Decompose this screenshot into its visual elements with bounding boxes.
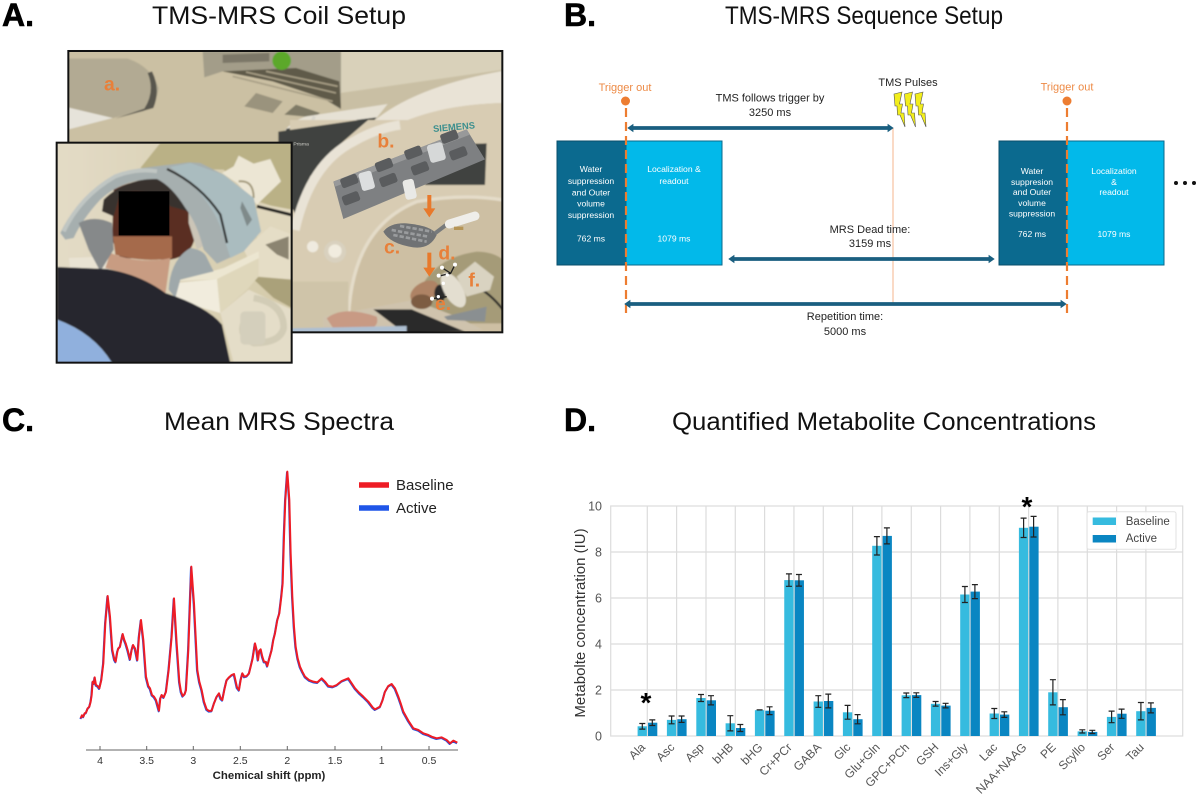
x axis category labels <box>626 740 1147 797</box>
x axis category labels: Scyllo <box>1056 740 1088 773</box>
orange labels a to f: f. <box>468 271 480 292</box>
x axis tick labels: 0.5 <box>422 755 436 767</box>
legend: Baseline <box>1126 516 1170 528</box>
timing block left: water suppression: 762 ms <box>577 234 605 244</box>
x axis category labels: Asp <box>682 740 707 765</box>
significance star: Ala: * <box>641 687 652 718</box>
text: TMS follows trigger by 3250 ms: TMS follows trigger by <box>716 92 825 104</box>
x axis tick labels <box>97 755 436 767</box>
text: MRS dead time 3159 ms <box>830 224 910 250</box>
label: TMS pulses: TMS Pulses <box>878 77 938 89</box>
title: Mean MRS Spectra: Mean MRS Spectra <box>164 408 394 436</box>
timing block right: water suppression: volume <box>1018 198 1046 208</box>
title: Quantified Metabolite Concentrations: Quantified Metabolite Concentrations <box>672 408 1096 436</box>
timing block right: localization and readout: & <box>1111 177 1117 187</box>
trigger out left: label, dot, dashed line: Trigger out <box>599 82 651 94</box>
text: repetition time 5000 ms <box>807 311 883 338</box>
timing block right: water suppression: suppresion <box>1011 177 1053 187</box>
orange labels a to f <box>104 75 480 315</box>
orange labels a to f: d. <box>438 243 456 264</box>
scanner lower body <box>278 118 503 334</box>
shirt <box>57 267 230 363</box>
legend: Active <box>1126 533 1157 545</box>
timing block right: water suppression: and Outer <box>1013 187 1051 197</box>
pads <box>79 219 114 271</box>
panel D: metabolite bar chart <box>572 491 1183 797</box>
icon: receiver coil paddle <box>383 216 475 248</box>
y axis tick labels: 0 <box>595 730 602 744</box>
coil position markers <box>430 263 457 301</box>
y axis tick labels: 10 <box>588 500 602 514</box>
timing block right: localization and readout: 1079 ms <box>1098 229 1130 239</box>
x axis tick labels: 4 <box>97 755 103 767</box>
legend: Baseline <box>396 477 454 494</box>
black anonymising square <box>119 191 169 235</box>
x axis category labels: Tau <box>1123 740 1147 764</box>
coil arch <box>60 162 230 264</box>
legend <box>359 477 454 517</box>
panel letter D: D. <box>564 402 596 438</box>
x axis category labels: bHG <box>738 740 765 768</box>
x axis category labels: Ins+Gly <box>932 740 971 779</box>
timing block left: water suppression: suppression <box>568 210 614 220</box>
grid lines <box>611 506 1183 736</box>
panel A: coil setup photographs <box>56 51 504 364</box>
timing block left: water suppression <box>557 141 626 265</box>
timing block left: water suppression: Water <box>580 164 602 174</box>
arrow: MRS dead time <box>729 256 994 262</box>
title: TMS-MRS Coil Setup: TMS-MRS Coil Setup <box>152 2 406 30</box>
text: repetition time 5000 ms: 5000 ms <box>824 326 867 338</box>
x axis category labels: GSH <box>913 740 941 769</box>
x axis category labels: GABA <box>791 740 824 774</box>
orange labels a to f: b. <box>377 132 395 153</box>
upper room <box>68 51 504 130</box>
x axis tick labels: 1.5 <box>328 755 342 767</box>
trigger out right: label, dot, dashed line: Trigger out <box>1041 82 1093 94</box>
line: baseline spectrum <box>81 472 457 743</box>
text: MRS dead time 3159 ms: MRS Dead time: <box>830 224 910 236</box>
x axis category labels: Ser <box>1094 740 1117 763</box>
arrow: orange down <box>423 195 435 217</box>
timing block right: localization and readout: Localization <box>1091 166 1137 176</box>
x axis category labels: Glc <box>831 740 853 763</box>
text: TMS follows trigger by 3250 ms <box>716 92 825 119</box>
y axis tick labels: 2 <box>595 684 602 698</box>
y axis tick labels: 4 <box>595 638 602 652</box>
x axis category labels: Ala <box>626 740 648 762</box>
spectrum lines <box>80 472 457 744</box>
timing block right: water suppression: 762 ms <box>1018 229 1046 239</box>
legend: Active <box>396 500 437 517</box>
trigger out right: label, dot, dashed line <box>1041 82 1093 317</box>
scanner upper body <box>286 70 502 132</box>
x axis with ticks <box>86 746 458 750</box>
x axis tick labels: 2 <box>284 755 290 767</box>
timing block right: localization and readout <box>1067 141 1164 265</box>
icon: lightning bolts <box>894 92 926 127</box>
bars: baseline <box>638 528 1146 736</box>
significance star: NAA+NAAG: * <box>1022 491 1033 522</box>
orange labels a to f: e. <box>435 294 451 315</box>
text: repetition time 5000 ms: Repetition time: <box>807 311 883 323</box>
timing block right: water suppression: suppression <box>1009 208 1055 218</box>
timing block left: localization and readout: 1079 ms <box>658 234 690 244</box>
x axis title: Chemical shift (ppm) <box>213 770 326 782</box>
orange labels a to f: a. <box>104 75 120 96</box>
arrow: orange down <box>423 253 435 277</box>
timing block left: water suppression: and Outer <box>572 188 610 198</box>
timing block left: localization and readout: Localization & <box>647 164 701 174</box>
icon: gray coil plate <box>333 129 485 219</box>
arrow: trigger to TMS <box>628 124 893 132</box>
photo: coil on participant's head <box>56 142 293 364</box>
y axis title: Metabolte concentration (IU) <box>572 528 589 718</box>
orange labels a to f: c. <box>384 237 400 258</box>
x axis category labels: PE <box>1037 740 1059 761</box>
error bars <box>639 516 1154 734</box>
y axis tick labels: 8 <box>595 546 602 560</box>
y axis tick labels <box>588 500 602 744</box>
x axis category labels: NAA+NAAG <box>973 740 1029 797</box>
photo: MRI scanner room <box>68 51 504 334</box>
panel letter C: C. <box>2 402 34 438</box>
line: active spectrum <box>80 472 457 744</box>
x axis category labels: GPC+PCh <box>862 740 912 790</box>
bars: active <box>648 527 1156 736</box>
x axis tick labels: 1 <box>379 755 385 767</box>
x axis category labels: Glu+Gln <box>841 740 883 781</box>
TMS pulse time marker <box>892 128 894 304</box>
x axis category labels: Cr+PCr <box>756 740 795 779</box>
timing block left: localization and readout <box>626 141 722 265</box>
x axis category labels: bHB <box>710 740 736 767</box>
panel C: mean MRS spectra line chart <box>80 472 458 782</box>
timing block left: water suppression: volume <box>577 198 605 208</box>
timing block right: localization and readout: readout <box>1099 187 1129 197</box>
icon: white connector <box>402 178 417 200</box>
SIEMENS scanner logo: SIEMENS <box>433 120 475 134</box>
x axis tick labels: 3.5 <box>139 755 154 767</box>
ellipsis dots <box>1174 181 1196 185</box>
x axis tick labels: 2.5 <box>233 755 248 767</box>
x axis category labels: Asc <box>653 740 677 764</box>
text: MRS dead time 3159 ms: 3159 ms <box>849 238 892 250</box>
scanner model label: Prisma <box>293 142 309 148</box>
x axis category labels: Lac <box>977 740 1000 764</box>
panel B: sequence timing diagram <box>557 77 1196 338</box>
x axis tick labels: 3 <box>190 755 196 767</box>
timing block right: water suppression <box>999 141 1067 265</box>
legend <box>1087 512 1176 549</box>
title: TMS-MRS Sequence Setup: TMS-MRS Sequence Setup <box>725 2 1003 30</box>
arrow: repetition time <box>625 300 1066 308</box>
y axis tick labels: 6 <box>595 592 602 606</box>
text: TMS follows trigger by 3250 ms: 3250 ms <box>749 107 792 119</box>
head <box>112 181 194 260</box>
timing block right: water suppression: Water <box>1021 166 1043 176</box>
timing block left: water suppression: suppression <box>568 176 614 186</box>
trigger out left: label, dot, dashed line <box>599 82 651 317</box>
timing block left: localization and readout: readout <box>659 176 689 186</box>
